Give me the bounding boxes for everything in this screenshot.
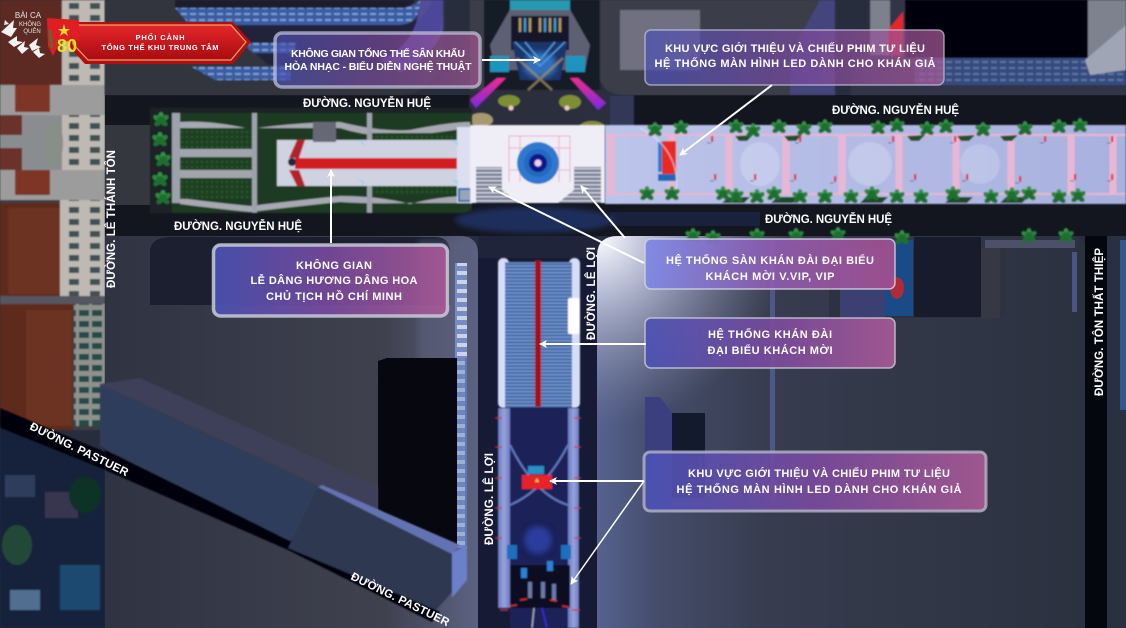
callout: incense and flower offering (214, 245, 448, 316)
callout: documentary film top: KHU VỰC GIỚI THIỆU VÀ CHIẾU PHIM TƯ LIỆU (665, 42, 925, 55)
aerial surroundings lower left (0, 408, 105, 628)
callout: incense and flower offering: LỄ DÂNG HƯƠNG DÂNG HOA (250, 274, 418, 287)
callout: concert stage space: HÒA NHẠC - BIỂU DIỄN NGHỆ THUẬT (284, 60, 472, 73)
arrow: to left VIP stand (489, 187, 644, 263)
callout: VIP stand: KHÁCH MỜI V.VIP, VIP (706, 270, 834, 283)
street labels: ĐƯỜNG. NGUYỄN HUỆ (765, 213, 892, 226)
callout: concert stage space: KHÔNG GIAN TỔNG THỂ SÂN KHẤU (291, 47, 465, 60)
road: Lê Lợi (478, 236, 598, 628)
callout: incense and flower offering: KHÔNG GIAN (296, 259, 372, 272)
block: lower left plaza (105, 236, 478, 628)
callout: delegate stand: ĐẠI BIỂU KHÁCH MỜI (708, 344, 832, 357)
street labels: ĐƯỜNG. LÊ LỢI (585, 247, 598, 340)
logo: Bài ca không quên 80: 80 (57, 36, 77, 56)
title ribbon (68, 22, 251, 64)
central plaza with LED circle (470, 125, 621, 203)
callout: VIP stand (645, 239, 895, 289)
callout: documentary film top (645, 30, 944, 85)
callout: VIP stand: HỆ THỐNG SÀN KHÁN ĐÀI ĐẠI BIỂU (666, 253, 874, 267)
building: diagonal slabs and Pastuer road (100, 378, 467, 622)
street labels: ĐƯỜNG. NGUYỄN HUỆ (174, 220, 302, 233)
callout: documentary film bottom (644, 452, 986, 511)
street labels: ĐƯỜNG. NGUYỄN HUỆ (303, 97, 431, 110)
arrow: to offering space (330, 170, 332, 243)
grandstand on Lê Lợi (498, 258, 580, 408)
callout: documentary film top: HỆ THỐNG MÀN HÌNH LED DÀNH CHO KHÁN GIẢ (654, 56, 936, 70)
stage: concert and performance (468, 0, 634, 135)
building: black tower (378, 358, 457, 545)
arrow: to flag screen (680, 85, 772, 155)
callout: delegate stand (645, 318, 895, 368)
callout: documentary film bottom: HỆ THỐNG MÀN HÌNH LED DÀNH CHO KHÁN GIẢ (676, 482, 962, 496)
street labels: ĐƯỜNG. TÔN THẤT THIỆP (1093, 248, 1106, 396)
arrow: to stage (482, 59, 540, 61)
title ribbon: PHỐI CẢNH (136, 32, 184, 42)
callout: incense and flower offering: CHỦ TỊCH HỒ CHÍ MINH (266, 290, 402, 303)
logo: Bài ca không quên 80: BÀI CA (15, 11, 42, 20)
logo: Bài ca không quên 80 (1, 11, 79, 58)
title ribbon: TỔNG THỂ KHU TRUNG TÂM (102, 43, 218, 52)
callout: concert stage space (275, 33, 480, 87)
building: left heritage block (0, 0, 105, 430)
road: Nguyễn Huệ top and bottom (105, 95, 1126, 236)
park: flower offering space (150, 108, 472, 213)
callout: delegate stand: HỆ THỐNG KHÁN ĐÀI (708, 327, 832, 341)
building: top right gray and flag tower (600, 0, 1126, 95)
street labels: ĐƯỜNG. LÊ THÁNH TÔN (105, 150, 118, 288)
street labels: ĐƯỜNG. NGUYỄN HUỆ (832, 104, 959, 117)
street labels: ĐƯỜNG. PASTUER (349, 570, 452, 628)
building: top left glass arc (105, 0, 445, 95)
street labels: ĐƯỜNG. PASTUER (28, 420, 131, 479)
plants along top of right block (684, 227, 1075, 245)
street labels: ĐƯỜNG. LÊ LỢI (483, 453, 496, 545)
LED screen zone on Lê Lợi (495, 408, 581, 628)
arrow: to delegate stand (540, 343, 646, 345)
arrow: to bottom screens (571, 481, 644, 584)
road: Tôn Thất Thiệp and far right block (1085, 236, 1126, 628)
arrow: to right VIP stand (581, 186, 625, 238)
arrow: to red flag screen (550, 480, 644, 482)
block: right plaza (597, 236, 1085, 628)
logo: Bài ca không quên 80: KHÔNG (19, 21, 41, 28)
pedestrian street with flag and plants (605, 118, 1126, 204)
logo: Bài ca không quên 80: QUÊN (23, 27, 41, 35)
callout: documentary film bottom: KHU VỰC GIỚI THIỆU VÀ CHIẾU PHIM TƯ LIỆU (688, 467, 950, 480)
